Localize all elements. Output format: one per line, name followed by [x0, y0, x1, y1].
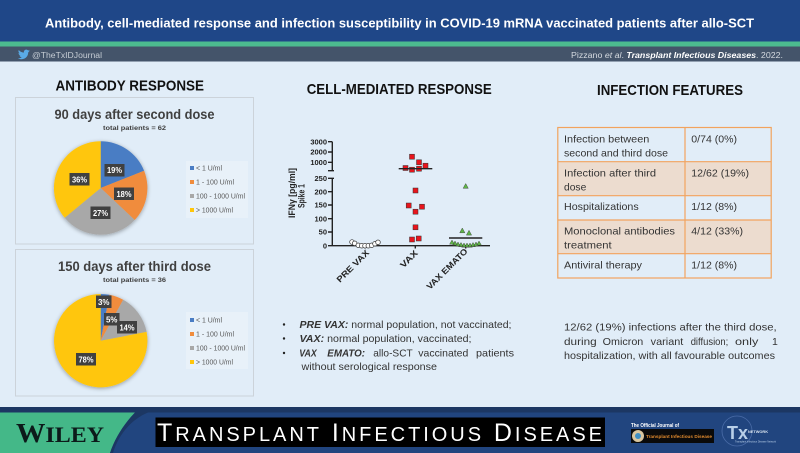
footer banner: [0, 407, 800, 453]
summary text: variant: [651, 336, 683, 348]
row: antiviral therapy: 1/12 (8%): [691, 259, 737, 271]
legend: 1 - 100 U/ml: [196, 180, 234, 187]
row: between doses: [564, 133, 737, 159]
group definitions list: EMATO:: [327, 348, 365, 360]
legend: 100 - 1000 U/ml: [196, 346, 245, 353]
row: between doses: second and third dose: [564, 147, 668, 159]
row: after third dose: 12/62 (19%): [691, 167, 749, 179]
heading: infection features: INFECTION FEATURES: [597, 82, 743, 99]
group definitions list: without serological response: [300, 361, 437, 373]
data labels: 19%: [107, 166, 122, 175]
vax emato points: [449, 184, 482, 247]
y axis tick labels: 150: [314, 201, 327, 210]
data labels: 5%: [106, 316, 118, 324]
data labels: 18%: [116, 190, 132, 199]
header banner: [0, 0, 800, 62]
group definitions list: patients: [476, 348, 514, 360]
panel: 150 days after third dose: [16, 250, 254, 396]
summary text: [564, 322, 778, 362]
y axis tick labels: [310, 137, 327, 250]
legend: 100 - 1000 U/ml: [196, 194, 245, 201]
data labels: 14%: [120, 324, 134, 332]
patient count: total patients = 62: [103, 125, 166, 132]
y axis tick labels: 2000: [310, 148, 327, 157]
summary text: 12/62 (19%) infections after the third dose,: [564, 322, 777, 334]
y axis tick labels: 50: [319, 228, 327, 237]
table: infection features: [558, 128, 771, 278]
row: antiviral therapy: [564, 259, 737, 271]
group definitions list: allo-SCT: [373, 348, 413, 360]
y axis tick labels: 3000: [310, 137, 327, 146]
row: antiviral therapy: Antiviral therapy: [564, 259, 643, 271]
dot plot: IFN gamma by group: [287, 137, 490, 291]
official journal badge: The Official Journal of: [631, 423, 679, 429]
data labels: 3%: [98, 298, 110, 307]
y axis tick labels: 0: [323, 241, 327, 250]
group definitions list: [283, 319, 514, 373]
row: monoclonal antibodies: treatment: [564, 239, 612, 251]
summary text: only: [735, 336, 759, 348]
row: hospitalizations: Hospitalizations: [564, 201, 639, 213]
journal name: TRANSPLANT INFECTIOUS DISEASE: [157, 419, 602, 447]
y axis title: IFNγ [pg/ml]: [287, 168, 297, 218]
legend: > 1000 U/ml: [196, 360, 233, 367]
citation: Pizzano et al. Transplant Infectious Diseases . 2022.: [571, 51, 783, 60]
wiley logo: WILEY: [16, 418, 104, 448]
row: between doses: Infection between: [564, 133, 649, 145]
data labels: 78%: [78, 356, 94, 364]
data labels: [70, 164, 134, 219]
legend: < 1 U/ml: [196, 318, 222, 325]
y axis tick labels: 250: [314, 174, 327, 183]
row: monoclonal antibodies: Monoclonal antibodies: [564, 225, 675, 237]
legend: 1 - 100 U/ml: [196, 332, 234, 339]
y axis title: Spike 1: [296, 184, 306, 208]
row: after third dose: dose: [564, 181, 586, 193]
vax points: [399, 154, 432, 242]
x axis labels: [334, 246, 470, 291]
summary text: 1: [772, 336, 778, 348]
group definitions list: VAX: [299, 348, 318, 360]
y axis tick labels: 200: [314, 187, 327, 196]
official journal badge: [631, 423, 714, 443]
TxID network logo: Tx: [727, 423, 748, 443]
title: Antibody, cell-mediated response and infection susceptibility in COVID-19 mRNA vaccinated patients after allo-SCT: [45, 15, 754, 30]
y axis tick labels: 1000: [310, 158, 327, 167]
pie chart: [54, 141, 147, 235]
legend: < 1 U/ml: [196, 166, 222, 173]
pie chart: [54, 294, 147, 387]
data labels: 27%: [93, 209, 108, 218]
data labels: 36%: [72, 176, 87, 184]
legend: [186, 161, 248, 218]
row: monoclonal antibodies: 4/12 (33%): [691, 225, 743, 237]
group definitions list: vaccinated: [418, 348, 468, 360]
y axis title: [287, 168, 306, 218]
heading: antibody response: ANTIBODY RESPONSE: [56, 78, 204, 94]
twitter handle: @TheTxIDJournal: [32, 51, 102, 60]
y axis tick labels: 100: [314, 214, 327, 223]
x axis labels: VAX EMATO: [424, 246, 470, 291]
row: between doses: 0/74 (0%): [691, 133, 737, 145]
heading: cell-mediated response: CELL-MEDIATED RESPONSE: [307, 81, 492, 98]
data labels: [76, 296, 137, 366]
row: after third dose: Infection after third: [564, 167, 656, 179]
row: after third dose: [564, 167, 749, 193]
chart heading: 150 days after third dose: [58, 259, 211, 274]
patient count: total patients = 36: [103, 277, 166, 284]
axes: [328, 142, 490, 248]
group definitions list: VAX: normal population, vaccinated;: [300, 333, 472, 345]
summary text: hospitalization, with all favourable outcomes: [564, 350, 775, 362]
summary text: during: [564, 336, 597, 348]
legend: > 1000 U/ml: [196, 208, 233, 215]
chart heading: 90 days after second dose: [54, 107, 215, 122]
legend: [186, 312, 248, 369]
summary text: diffusion;: [691, 336, 728, 348]
panel: 90 days after second dose: [16, 98, 254, 244]
row: hospitalizations: [564, 201, 737, 213]
TxID network logo: Transplant Infectious Disease Network: [735, 440, 776, 444]
row: monoclonal antibodies: [564, 225, 743, 251]
row: hospitalizations: 1/12 (8%): [691, 201, 737, 213]
pre vax points: [350, 240, 380, 248]
summary text: Omicron: [603, 336, 643, 348]
icon: twitter bird: [18, 50, 30, 59]
official journal badge: Transplant Infectious Disease: [646, 434, 712, 440]
TxID network logo: NETWORK: [748, 430, 768, 434]
x axis labels: PRE VAX: [334, 247, 371, 284]
group definitions list: PRE VAX: normal population, not vaccinated;: [300, 319, 512, 331]
x axis labels: VAX: [398, 248, 420, 270]
TxID network logo: [722, 416, 776, 446]
